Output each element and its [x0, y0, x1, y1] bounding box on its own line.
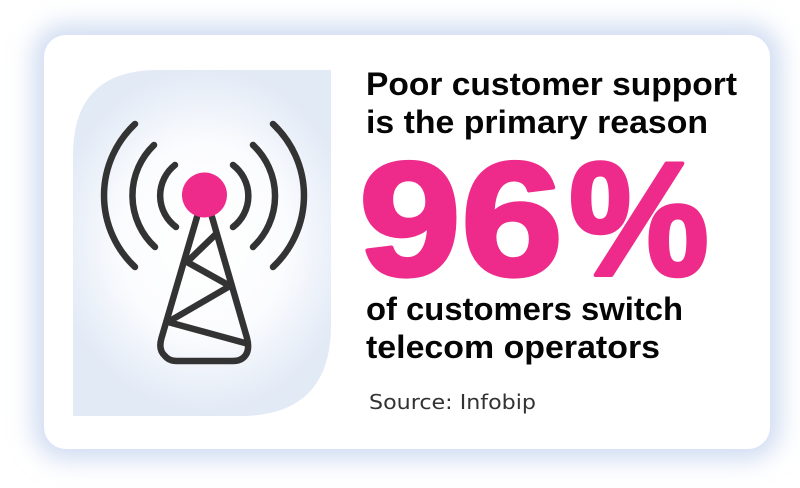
- icon: tower beacon: [182, 172, 227, 218]
- heading: first lines: Poor customer support: [366, 66, 737, 102]
- text: closing lines: telecom operators: [366, 329, 660, 365]
- icon: tower structure: [160, 217, 248, 361]
- text: closing lines: of customers switch: [366, 291, 683, 327]
- big number: 96%: [359, 129, 709, 310]
- icon: right signal waves: [233, 124, 304, 267]
- icon: left signal waves: [104, 124, 176, 267]
- percent sign: %: [569, 129, 709, 310]
- digits: 96: [359, 129, 563, 310]
- card: [44, 35, 770, 449]
- heading: first lines: is the primary reason: [366, 104, 708, 140]
- source: Source: Infobip: [369, 390, 536, 414]
- panel: icon background: [73, 70, 331, 416]
- icon: telecom tower: [104, 124, 304, 361]
